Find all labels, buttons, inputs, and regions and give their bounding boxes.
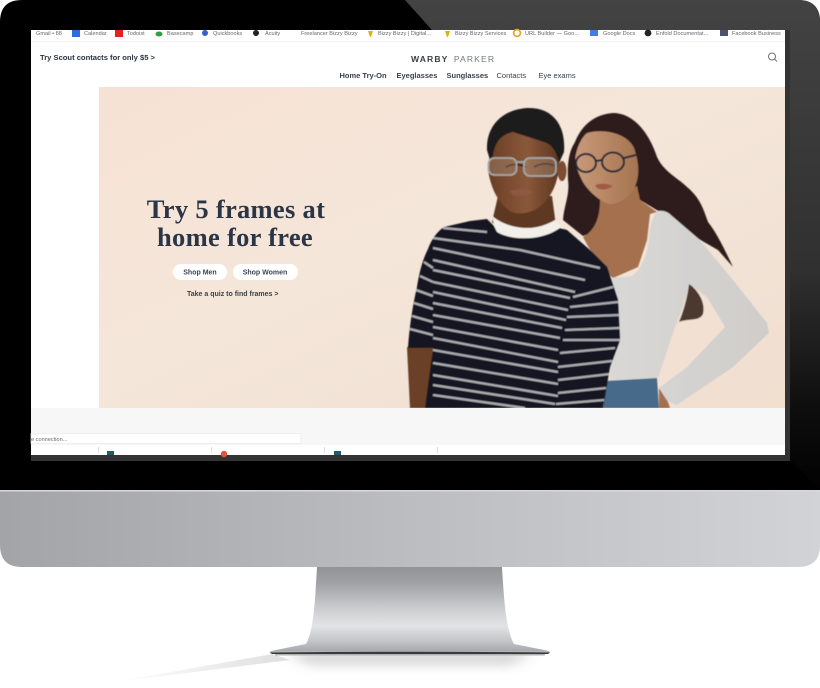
bookmarks bar: Acuity: [265, 31, 280, 37]
navigation: Contacts: [496, 71, 526, 80]
woman's hair: [563, 113, 733, 267]
collar: [492, 216, 563, 240]
navigation: [340, 71, 576, 80]
stand shadow: [115, 652, 535, 682]
bookmarks bar: Quickbooks: [213, 31, 242, 37]
bookmarks bar: Bizzy Bizzy | Digital...: [378, 31, 431, 37]
headline: [147, 194, 325, 252]
man's glasses: [488, 158, 556, 176]
navigation: Sunglasses: [446, 71, 488, 80]
photo: woman: [563, 113, 769, 408]
striped sweater: [407, 218, 621, 408]
gap between arm and torso: [658, 284, 725, 388]
bookmarks bar: Enfold Documentat...: [656, 31, 709, 37]
silver chin: [0, 490, 820, 567]
headline: Try 5 frames at: [147, 194, 325, 224]
quiz link: Take a quiz to find frames >: [187, 291, 278, 298]
button: shop men: [173, 264, 227, 280]
footer area: e connection...: [31, 437, 68, 443]
bookmarks bar: Freelancer Bizzy Bizzy: [301, 31, 358, 37]
curls: [680, 284, 704, 326]
neck and chest: [583, 186, 657, 278]
hero banner: [99, 87, 785, 408]
bookmarks bar: Google Docs: [603, 31, 636, 37]
screen: [31, 30, 790, 461]
button: shop women: Shop Women: [243, 270, 287, 276]
photo: man: [400, 108, 630, 410]
bookmarks bar: Todoist: [127, 31, 145, 37]
woman's glasses: [576, 152, 636, 172]
face: [488, 128, 559, 213]
top: [610, 211, 769, 405]
button: shop men: Shop Men: [183, 270, 217, 276]
hair: [487, 108, 564, 163]
navigation: Eye exams: [538, 71, 576, 80]
navigation: Home Try-On: [340, 71, 387, 80]
icon: search: [768, 53, 777, 62]
bookmarks bar: Bizzy Bizzy Services: [455, 31, 506, 37]
neck: [492, 196, 556, 236]
promo link: Try Scout contacts for only $5 >: [40, 53, 156, 62]
bookmarks bar: Basecamp: [167, 31, 193, 37]
bookmarks bar: URL Builder — Goo...: [525, 31, 579, 37]
bookmarks bar: Facebook Business: [732, 31, 781, 37]
navigation: Eyeglasses: [396, 71, 437, 80]
button: shop women: [233, 264, 298, 280]
bookmarks bar: Calendar: [84, 31, 107, 37]
stand: [270, 567, 550, 656]
black bezel: [0, 0, 820, 490]
forearm: [407, 347, 433, 408]
headline: home for free: [157, 222, 313, 252]
bookmarks bar: [31, 30, 785, 42]
face: [575, 131, 638, 204]
jeans: [603, 378, 659, 408]
bookmarks bar: Gmail • 88: [36, 31, 62, 37]
footer area: [31, 408, 785, 457]
logo: WARBY PARKER: [411, 54, 495, 64]
